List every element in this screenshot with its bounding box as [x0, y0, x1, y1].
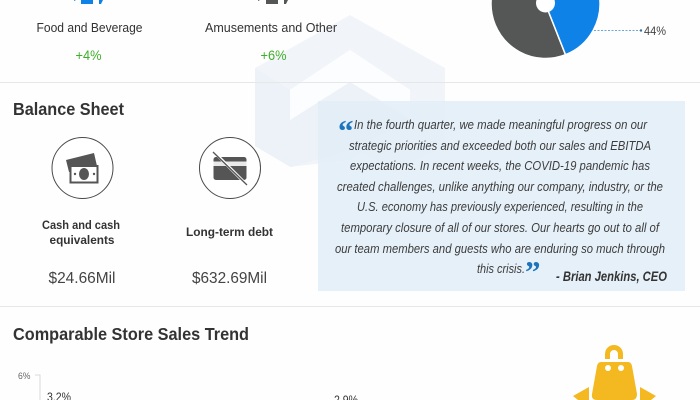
stat: cash and cash equivalents: $24.66Mil — [48, 270, 116, 287]
quote text: U.S. economy has previously experienced, resulting in the — [357, 199, 643, 214]
closing quote mark: ” — [525, 254, 540, 289]
pie callout: 44% — [594, 24, 666, 38]
quote text: created challenges, unlike anything our company, industry, or the — [337, 179, 663, 194]
quote text: this crisis. — [477, 261, 525, 276]
panel: CEO quote — [318, 101, 685, 291]
stat: amusements and other: Amusements and Other — [205, 21, 337, 35]
heading: balance sheet: Balance Sheet — [13, 99, 124, 119]
stat: cash and cash equivalents — [42, 218, 120, 287]
quote attribution: - Brian Jenkins, CEO — [556, 269, 667, 284]
stat: long-term debt: Long-term debt — [186, 225, 273, 239]
stat: long-term debt — [186, 225, 273, 287]
stat: amusements and other — [205, 21, 337, 63]
heading: comparable store sales trend: Comparable Store Sales Trend — [13, 324, 249, 344]
stat: cash and cash equivalents: Cash and cash — [42, 218, 120, 232]
line chart: axis and labels: 6% — [18, 371, 30, 381]
icon: cash — [52, 138, 113, 198]
icon: amusements (cropped) — [258, 0, 288, 4]
quote text: temporary closure of all of our stores. Our hearts go out to all of — [341, 220, 660, 235]
quote text: strategic priorities and exceeded both our sales and EBITDA — [349, 138, 651, 153]
icon: shopping bag — [573, 345, 656, 400]
line chart: axis and labels — [18, 371, 358, 400]
stat: amusements and other: +6% — [260, 48, 286, 63]
quote text: our team members and guests who are enduring so much through — [335, 241, 665, 256]
stat: food and beverage — [36, 21, 143, 63]
stat: long-term debt: $632.69Mil — [192, 270, 267, 287]
section dividers — [0, 82, 700, 307]
stat: cash and cash equivalents: equivalents — [50, 233, 115, 247]
quote text — [335, 117, 665, 276]
icon: credit card crossed out — [200, 138, 260, 198]
watermark logo — [255, 15, 445, 172]
quote text: expectations. In recent weeks, the COVID-19 pandemic has — [350, 158, 651, 173]
stat: food and beverage: Food and Beverage — [36, 21, 143, 35]
quote text: In the fourth quarter, we made meaningful progress on our — [354, 117, 648, 132]
icon: food and beverage (cropped) — [74, 0, 103, 4]
stat: food and beverage: +4% — [76, 48, 102, 63]
pie callout: 44%: 44% — [644, 24, 666, 38]
opening quote mark: “ — [338, 113, 354, 148]
pie chart — [491, 0, 600, 59]
